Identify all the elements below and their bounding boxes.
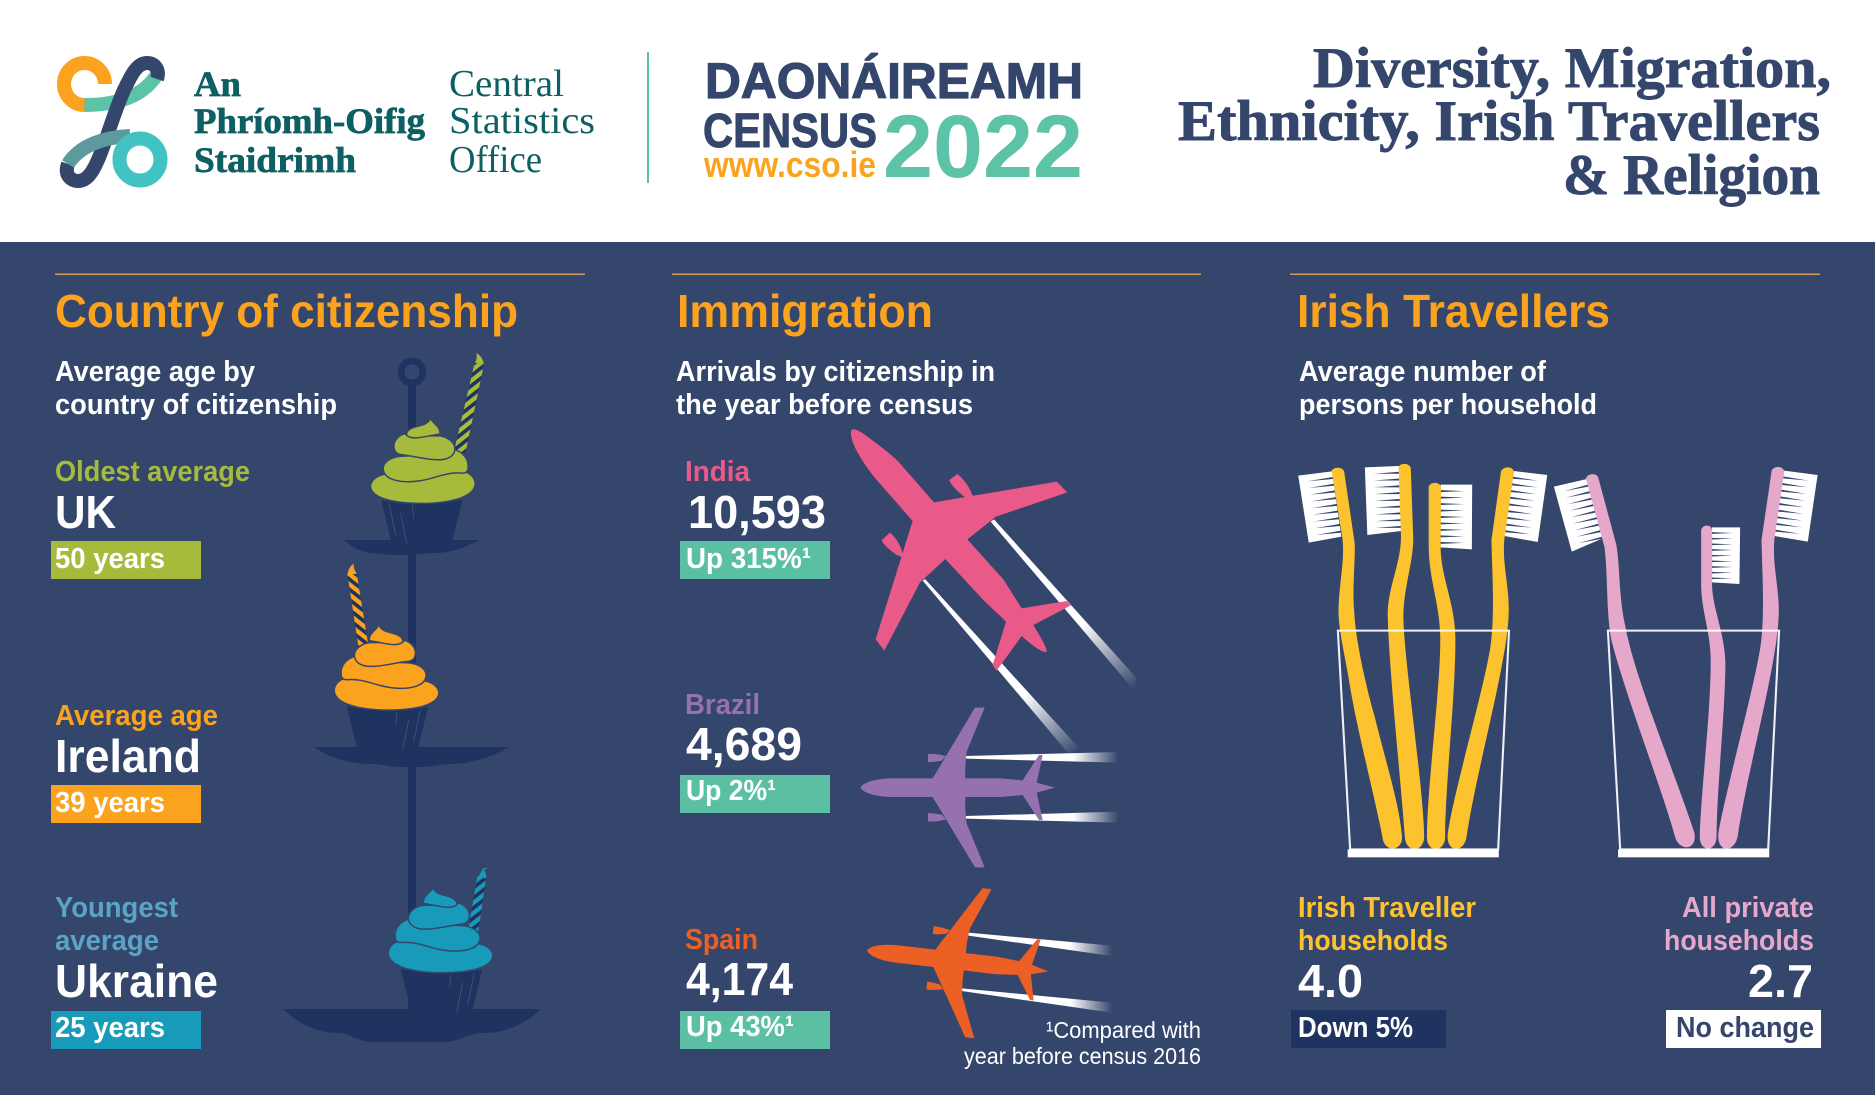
footnote: year before census 2016: [964, 1043, 1201, 1069]
footnote: [964, 1017, 1201, 1069]
census logo: www.cso.ie: [703, 144, 876, 185]
title: [1178, 37, 1831, 207]
stat: Brazil: Brazil: [685, 689, 760, 721]
stat: Spain: Spain: [685, 924, 758, 956]
title: Diversity, Migration,: [1313, 37, 1831, 100]
organisation name in English: Central: [449, 63, 564, 105]
icon: pink plane with contrails: [851, 429, 1136, 753]
panel: immigration: [672, 274, 1201, 1069]
stat: all private households: [1664, 892, 1821, 1048]
subheading: country of citizenship: [55, 389, 337, 421]
stat: India: India: [685, 456, 751, 488]
stat: youngest average: 25 years: [55, 1012, 165, 1044]
stat: youngest average: [51, 892, 218, 1049]
organisation name in English: Statistics: [449, 100, 595, 142]
icon: purple plane with contrails: [861, 708, 1118, 867]
footnote: ¹Compared with: [1046, 1017, 1201, 1043]
cake stand: [283, 361, 541, 1042]
stat: Irish Traveller households: 4.0: [1298, 955, 1363, 1007]
icon: orange candle: [347, 563, 368, 646]
subheading: Average number of: [1299, 356, 1546, 388]
organisation name in English: [449, 63, 595, 181]
page background: [0, 242, 1875, 1095]
stat: all private households: households: [1664, 925, 1814, 957]
heading: country of citizenship: Country of citizenship: [55, 285, 518, 337]
stat: Spain: [680, 924, 830, 1049]
icon: three pink toothbrushes in a glass: [1554, 467, 1818, 857]
stat: oldest average: Oldest average: [55, 456, 250, 488]
stat: Brazil: 4,689: [686, 718, 802, 770]
organisation name in Irish: [194, 64, 425, 180]
header band: [0, 0, 1875, 242]
subheading: [1299, 356, 1597, 421]
stat: oldest average: [51, 456, 250, 579]
subheading: [55, 356, 337, 421]
stat: Irish Traveller households: [1291, 892, 1476, 1048]
stat: Spain: Up 43%¹: [686, 1011, 794, 1043]
stat: average age: Average age: [55, 700, 218, 732]
panel: Irish Travellers: [1290, 274, 1821, 1048]
stat: average age: Ireland: [55, 730, 201, 782]
subheading: Arrivals by citizenship in: [676, 356, 995, 388]
stat: oldest average: UK: [55, 486, 116, 538]
subheading: the year before census: [676, 389, 973, 421]
stat: all private households: All private: [1682, 892, 1814, 924]
icon: orange cupcake: [335, 626, 438, 750]
organisation name in Irish: Phríomh-Oifig: [194, 101, 425, 141]
title: Ethnicity, Irish Travellers: [1178, 90, 1820, 153]
census logo: CENSUS: [703, 105, 877, 158]
census logo: DAONÁIREAMH: [705, 53, 1083, 109]
heading: immigration: Immigration: [677, 285, 933, 337]
organisation name in Irish: Staidrimh: [194, 140, 356, 180]
organisation name in English: Office: [449, 139, 542, 181]
organisation name in Irish: An: [194, 64, 241, 104]
census logo: 2022: [883, 96, 1083, 196]
icon: orange plane with contrails: [858, 876, 1112, 1046]
stat: India: Up 315%¹: [686, 543, 811, 575]
census logo: [703, 53, 1083, 196]
stat: Irish Traveller households: Irish Traveller: [1298, 892, 1476, 924]
title: & Religion: [1563, 144, 1820, 207]
stat: India: [680, 456, 830, 579]
stat: youngest average: Youngest: [55, 892, 178, 924]
stat: average age: 39 years: [55, 787, 165, 819]
stat: India: 10,593: [688, 486, 826, 538]
stat: youngest average: Ukraine: [55, 955, 218, 1007]
stat: youngest average: average: [55, 925, 159, 957]
icon: green cupcake: [371, 353, 484, 543]
stat: Irish Traveller households: households: [1298, 925, 1448, 957]
stat: Brazil: Up 2%¹: [686, 775, 776, 807]
stat: oldest average: 50 years: [55, 543, 165, 575]
icon: blue cupcake: [389, 867, 492, 1013]
heading: Irish Travellers: Irish Travellers: [1297, 285, 1610, 337]
stat: all private households: 2.7: [1748, 955, 1813, 1007]
panel: country of citizenship: [51, 274, 585, 1049]
stat: Spain: 4,174: [686, 953, 793, 1005]
stat: Brazil: [680, 689, 830, 813]
subheading: persons per household: [1299, 389, 1597, 421]
subheading: [676, 356, 995, 421]
icon: CSO logo mark: [64, 63, 160, 181]
subheading: Average age by: [55, 356, 255, 388]
stat: Irish Traveller households: Down 5%: [1298, 1012, 1413, 1044]
icon: four yellow toothbrushes in a glass: [1298, 464, 1547, 857]
stat: average age: [51, 700, 218, 823]
stat: all private households: No change: [1676, 1012, 1814, 1044]
